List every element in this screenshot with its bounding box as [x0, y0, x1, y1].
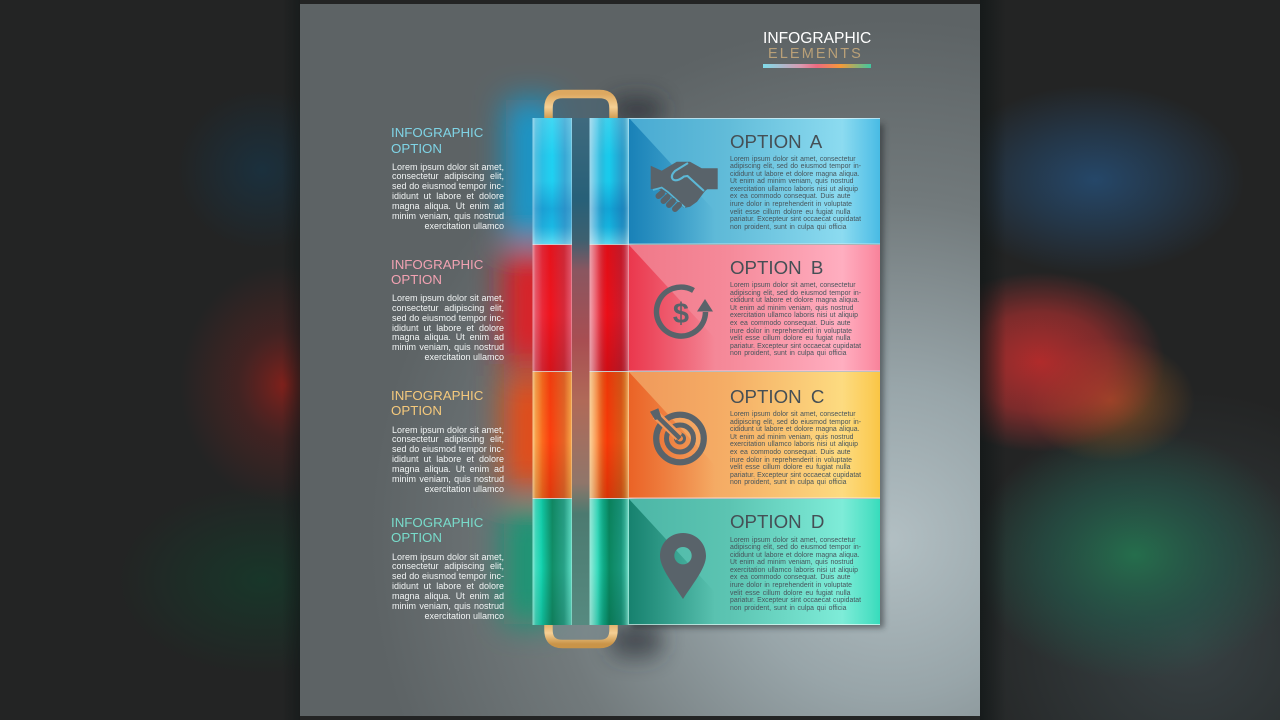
text: option A: irure dolor in reprehenderit in voluptate — [730, 201, 852, 208]
text: option D — [730, 536, 861, 612]
text: option D: exercitation ullamco laboris nisi ut aliquip — [730, 567, 858, 574]
text: option C: cididunt ut labore et dolore magna aliqua. — [730, 426, 860, 433]
text: left option 2: ididunt ut labore et dolore — [392, 323, 504, 333]
text: option D: non proident, sunt in culpa qui officia — [730, 605, 846, 612]
text: left option 4: Lorem ipsum dolor sit amet, — [392, 552, 504, 562]
text: left option 2: magna aliqua. Ut enim ad — [392, 332, 504, 342]
heading: left option 3: INFOGRAPHIC — [391, 388, 483, 402]
heading: left option 1: INFOGRAPHIC — [391, 125, 483, 140]
text: option C: pariatur. Excepteur sint occaecat cupidatat — [730, 472, 861, 479]
text: option D: adipiscing elit, sed do eiusmod tempor in- — [730, 544, 861, 551]
text: option A: velit esse cillum dolore eu fugiat nulla — [730, 209, 850, 216]
text: left option 3: consectetur adipiscing elit, — [392, 434, 504, 444]
text: left option 4: exercitation ullamco — [424, 611, 504, 621]
text: option B: Ut enim ad minim veniam, quis nostrud — [730, 305, 854, 312]
heading: left option 3: OPTION — [391, 403, 442, 418]
panel: option A band — [629, 118, 880, 245]
icon: dollar with circular arrow: $ — [673, 298, 689, 330]
text: left option 1: exercitation ullamco — [424, 221, 504, 231]
text: left option 1: ididunt ut labore et dolore — [392, 191, 504, 201]
heading: left option 2 — [391, 256, 483, 287]
text: left option 1 — [392, 162, 504, 231]
text: left option 3: exercitation ullamco — [424, 484, 504, 494]
text: option C — [730, 410, 861, 486]
text: option A — [730, 156, 861, 231]
text: option B: velit esse cillum dolore eu fugiat nulla — [730, 335, 850, 342]
text: option B: irure dolor in reprehenderit in voluptate — [730, 328, 852, 335]
icon: dollar with circular arrow — [657, 287, 713, 336]
text: left option 3: Lorem ipsum dolor sit amet, — [392, 424, 504, 434]
heading: left option 1 — [391, 125, 483, 156]
icon: handshake — [651, 162, 718, 209]
text: left option 1: sed do eiusmod tempor inc- — [392, 181, 504, 191]
heading: left option 4: OPTION — [391, 530, 442, 545]
text: option A: adipiscing elit, sed do eiusmod tempor in- — [730, 163, 861, 170]
panel: option C band — [629, 372, 880, 499]
heading: left option 3 — [391, 388, 483, 418]
text: left option 3: magna aliqua. Ut enim ad — [392, 464, 504, 474]
text: left option 3: minim veniam, quis nostrud — [392, 474, 504, 484]
text: option D: irure dolor in reprehenderit in voluptate — [730, 582, 852, 589]
text: left option 1: minim veniam, quis nostrud — [392, 211, 504, 221]
header title — [763, 30, 871, 62]
text: option A: pariatur. Excepteur sint occaecat cupidatat — [730, 216, 861, 223]
text: option D: Lorem ipsum dolor sit amet, consectetur — [730, 536, 856, 544]
gap below the strips inside handle — [553, 625, 609, 640]
text: left option 4: consectetur adipiscing elit, — [392, 561, 504, 571]
text: left option 2 — [392, 293, 504, 362]
text: option D: pariatur. Excepteur sint occaecat cupidatat — [730, 597, 861, 604]
text: option B: cididunt ut labore et dolore magna aliqua. — [730, 297, 860, 304]
handle: bottom loop — [548, 622, 614, 644]
gap between strips — [572, 118, 590, 625]
heading: left option 2: INFOGRAPHIC — [391, 256, 483, 272]
heading: option A: OPTION A — [730, 130, 822, 152]
text: left option 3 — [392, 424, 504, 494]
header underline bar — [763, 64, 871, 68]
icon: target with arrow — [650, 408, 704, 462]
text: left option 1: magna aliqua. Ut enim ad — [392, 201, 504, 211]
text: option A: non proident, sunt in culpa qui officia — [730, 224, 846, 231]
text: option A: exercitation ullamco laboris nisi ut aliquip — [730, 186, 858, 193]
heading: option D: OPTION D — [730, 511, 824, 532]
header title: ELEMENTS — [768, 46, 863, 62]
text: left option 2: minim veniam, quis nostrud — [392, 342, 504, 352]
heading: option C: OPTION C — [730, 386, 824, 406]
text: left option 2: sed do eiusmod tempor inc- — [392, 313, 504, 323]
text: option C: adipiscing elit, sed do eiusmod tempor in- — [730, 419, 861, 426]
text: option C: Lorem ipsum dolor sit amet, consectetur — [730, 411, 856, 418]
header title: INFOGRAPHIC — [763, 30, 871, 47]
text: option D: cididunt ut labore et dolore magna aliqua. — [730, 552, 860, 559]
text: left option 1: Lorem ipsum dolor sit amet, — [392, 162, 504, 172]
text: option B: ex ea commodo consequat. Duis aute — [730, 320, 850, 327]
text: option B: adipiscing elit, sed do eiusmod tempor in- — [730, 290, 861, 297]
heading: left option 4: INFOGRAPHIC — [391, 514, 483, 530]
text: option A: Lorem ipsum dolor sit amet, consectetur — [730, 156, 856, 162]
text: option A: ex ea commodo consequat. Duis aute — [730, 193, 850, 200]
text: left option 2: consectetur adipiscing elit, — [392, 303, 504, 313]
text: option C: non proident, sunt in culpa qui officia — [730, 479, 846, 486]
text: left option 4: magna aliqua. Ut enim ad — [392, 591, 504, 601]
text: option C: Ut enim ad minim veniam, quis nostrud — [730, 434, 854, 441]
text: left option 3: ididunt ut labore et dolore — [392, 454, 504, 464]
text: option D: ex ea commodo consequat. Duis aute — [730, 574, 850, 581]
panel: option D band — [629, 499, 880, 625]
text: option B — [730, 282, 861, 357]
left strip — [532, 118, 572, 625]
text: left option 4: ididunt ut labore et dolore — [392, 581, 504, 591]
text: option A: Ut enim ad minim veniam, quis nostrud — [730, 178, 854, 185]
text: option D: velit esse cillum dolore eu fugiat nulla — [730, 590, 850, 597]
text: option B: non proident, sunt in culpa qui officia — [730, 350, 846, 357]
text: left option 2: exercitation ullamco — [424, 352, 504, 362]
text: option B: exercitation ullamco laboris nisi ut aliquip — [730, 312, 858, 319]
gap above the strips inside handle — [553, 98, 609, 118]
text: option C: velit esse cillum dolore eu fugiat nulla — [730, 464, 850, 471]
text: left option 4: minim veniam, quis nostrud — [392, 601, 504, 611]
text: option C: ex ea commodo consequat. Duis aute — [730, 449, 850, 456]
right strip — [590, 118, 629, 625]
colour glows behind the strips — [504, 98, 884, 658]
text: left option 2: Lorem ipsum dolor sit amet, — [392, 293, 504, 303]
text: option A: cididunt ut labore et dolore magna aliqua. — [730, 171, 860, 178]
poster background — [300, 4, 980, 716]
heading: left option 4 — [391, 514, 483, 545]
text: option C: exercitation ullamco laboris nisi ut aliquip — [730, 441, 858, 448]
text: option D: Ut enim ad minim veniam, quis nostrud — [730, 559, 854, 566]
text: option B: pariatur. Excepteur sint occaecat cupidatat — [730, 343, 861, 350]
text: left option 4: sed do eiusmod tempor inc- — [392, 571, 504, 581]
text: left option 3: sed do eiusmod tempor inc- — [392, 444, 504, 454]
text: left option 1: consectetur adipiscing elit, — [392, 171, 504, 181]
heading: left option 1: OPTION — [391, 140, 442, 156]
heading: option B: OPTION B — [730, 257, 823, 278]
handle: top loop — [548, 94, 614, 120]
text: option B: Lorem ipsum dolor sit amet, consectetur — [730, 282, 856, 289]
text: left option 4 — [392, 552, 504, 621]
heading: left option 2: OPTION — [391, 272, 442, 287]
icon: map pin — [660, 533, 706, 599]
panel: option B band — [629, 245, 880, 372]
text: option C: irure dolor in reprehenderit in voluptate — [730, 457, 852, 464]
